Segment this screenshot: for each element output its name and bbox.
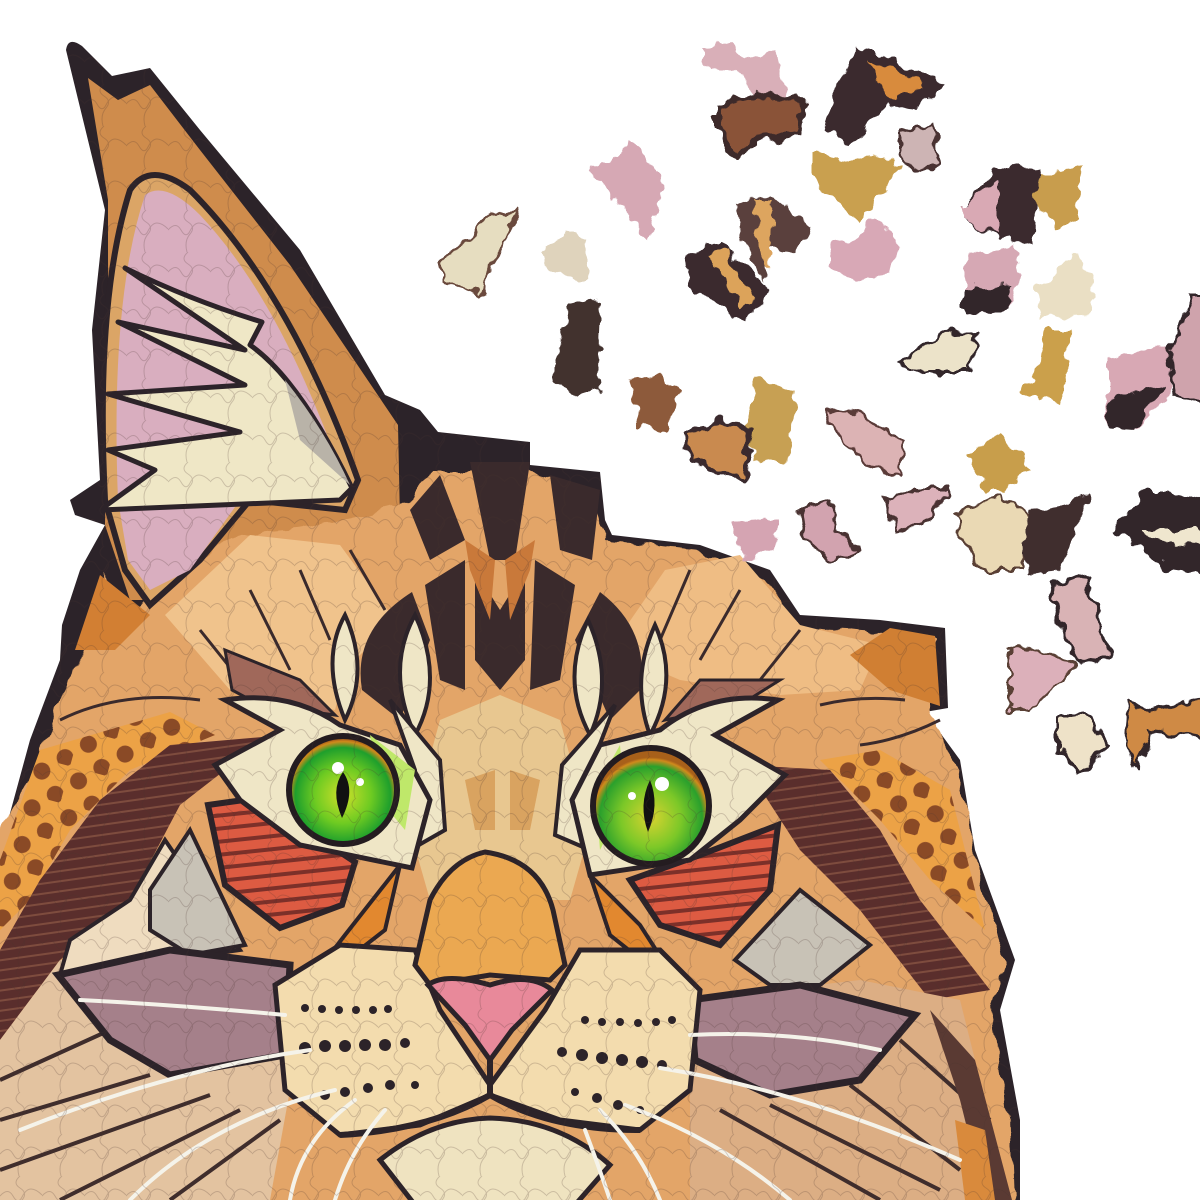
piece: dark cream [1020, 497, 1090, 575]
piece: pink lower [830, 218, 898, 282]
centre cream blaze right [555, 705, 615, 850]
right orange tear stripe [590, 875, 685, 995]
loose puzzle pieces [443, 42, 1200, 775]
right outer fur streaks [930, 1010, 1012, 1200]
piece: cream stripe [900, 330, 975, 372]
piece: dark cream orange [685, 420, 750, 480]
piece: edge pink cream [1170, 295, 1200, 405]
muzzle mouth line [340, 1060, 640, 1135]
piece: orange dark small [630, 375, 680, 435]
ear white tufts [100, 268, 352, 510]
piece: cream dark centre [955, 495, 1035, 570]
left eye [289, 736, 397, 844]
piece: tan right [1035, 165, 1080, 232]
left orange neck tuft [75, 575, 150, 650]
piece: dark tall [552, 300, 600, 395]
lower left fur linework [0, 1030, 280, 1200]
orange crown tiles [465, 540, 535, 620]
ear back fur [88, 78, 400, 600]
left whisker dots [299, 1004, 419, 1100]
right brown fur band [745, 765, 990, 1000]
piece: tan small [968, 435, 1032, 490]
piece: cream right [1035, 255, 1095, 318]
piece: tan stripes on bar [705, 248, 755, 305]
piece: pink dark low [965, 245, 1020, 315]
inner ear pink [117, 190, 340, 590]
piece: pink [590, 140, 665, 240]
right eye [593, 748, 709, 864]
left brown fur band [0, 735, 285, 1040]
bridge detail [465, 770, 540, 830]
muzzle [275, 945, 700, 1135]
right red under-eye patch [630, 825, 778, 945]
nose bridge panel [410, 695, 590, 900]
right eye glow [595, 745, 625, 850]
right polka-dot cheek [820, 750, 985, 930]
piece: cream pink small [545, 232, 592, 285]
piece: dark pink cluster [965, 165, 1040, 245]
left mauve whisker pad [58, 950, 290, 1075]
left eye glow [370, 735, 415, 830]
piece: mixed small [900, 125, 938, 172]
piece: dark with orange top [825, 44, 945, 145]
left eye socket cream [215, 698, 430, 868]
piece: right pink dark [1108, 345, 1180, 430]
piece: dark stripe right [1108, 385, 1165, 430]
whiskers [20, 1000, 960, 1200]
dark crown stripes [361, 462, 642, 720]
piece: stripe tan [755, 200, 772, 270]
piece: orange streak [870, 60, 925, 100]
right eye socket cream [572, 698, 785, 875]
piece: cream slash [1140, 530, 1200, 545]
piece: orange dark lower right [1125, 695, 1200, 770]
left polka-dot cheek [0, 712, 215, 930]
grey right cheek panel [735, 890, 870, 985]
right mauve whisker pad [690, 985, 915, 1095]
centre cream blaze left [390, 700, 445, 850]
piece: dark tan bar [685, 242, 770, 325]
piece: pink short [885, 488, 950, 532]
piece: pink dark mid [1050, 575, 1110, 665]
forehead fur strokes [60, 550, 940, 745]
piece: striped dark pink [735, 195, 810, 282]
upper right orange tuft [850, 628, 940, 706]
piece: pink strip [965, 180, 998, 235]
lower right fur [690, 980, 1010, 1200]
piece: pink cream long [825, 408, 905, 478]
head base fur [0, 470, 1015, 1200]
piece: pink dark vertical [800, 500, 860, 562]
piece: tan large [745, 378, 795, 465]
piece: cream dark [443, 210, 518, 295]
ear grey shadow [285, 380, 350, 485]
left orange tear stripe [295, 865, 400, 1000]
piece: cream dark lower [1058, 712, 1108, 775]
pink nose [428, 978, 552, 1060]
chin [380, 1118, 610, 1200]
piece: top cream and pink [700, 42, 788, 100]
left brown brow feathers [225, 650, 335, 715]
piece: near-head pink [732, 518, 778, 560]
ear cartilage rim [103, 175, 358, 605]
forehead right tan panel [610, 555, 880, 695]
grey left cheek panel [150, 830, 245, 955]
piece: pink cream lower [1010, 645, 1075, 710]
lower left fur [0, 960, 290, 1200]
lower right fur linework [720, 1040, 990, 1200]
piece: dark band [965, 285, 1012, 315]
cream left under-band [60, 840, 240, 975]
piece: brown tile [718, 95, 803, 158]
piece: tan zigzag [1022, 330, 1072, 405]
right orange fur sliver [955, 1120, 995, 1200]
forehead left tan panel [165, 535, 395, 710]
right whisker dots [557, 1016, 676, 1114]
cream forehead leaves [332, 615, 666, 735]
right brown brow feathers [665, 680, 780, 720]
piece: tan cardboard [812, 152, 903, 222]
left red under-eye patch [208, 798, 355, 928]
nose orange bridge [415, 852, 565, 985]
piece: dark large right [1115, 490, 1200, 575]
